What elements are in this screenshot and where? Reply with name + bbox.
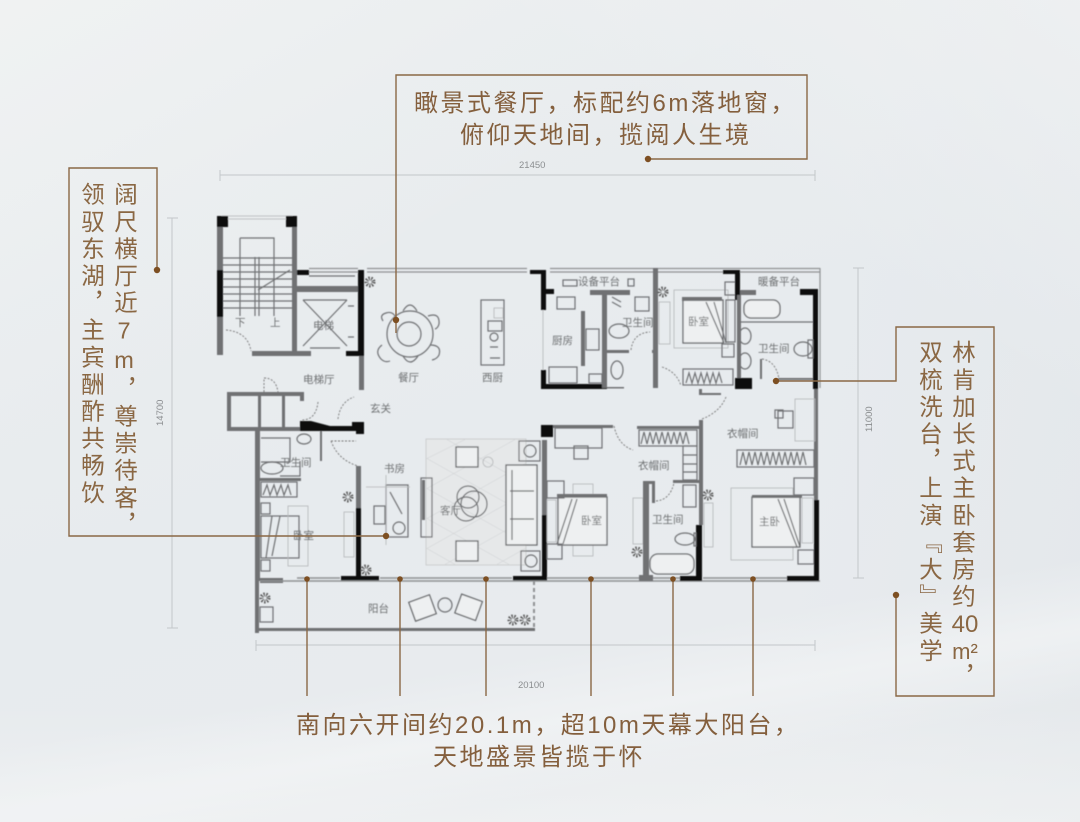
west bedroom: 卧室 (293, 529, 314, 542)
balcony: 阳台 (368, 602, 389, 615)
western kitchen (481, 300, 504, 384)
master bath (723, 270, 818, 389)
dimension: 20100: 20100 (518, 680, 544, 691)
kitchen (530, 270, 634, 389)
elevator: 电梯 (313, 319, 334, 332)
south-centre closet and bath: 卫生间 (652, 513, 684, 526)
living room: 客厅 (440, 504, 461, 517)
elevator hall and entry: 玄关 (370, 402, 391, 415)
western kitchen: 西厨 (482, 372, 503, 384)
callout: dining room view (393, 75, 807, 333)
kitchen: 设备平台 (578, 275, 620, 288)
callout text (414, 90, 797, 149)
living room (421, 439, 540, 571)
north-centre bath: 卫生间 (622, 316, 654, 329)
master bedroom (704, 478, 819, 581)
north bedroom: 卧室 (688, 315, 709, 328)
callout vertical text: ， (949, 664, 975, 691)
dimension lines (155, 160, 875, 691)
callout: south frontage (296, 576, 800, 771)
master walk-in closet (699, 389, 818, 525)
stairwell: 上 (270, 317, 280, 329)
balcony (255, 581, 535, 633)
study and west bath walls (255, 431, 379, 583)
callout vertical text: 阔尺横厅近7m，尊崇待客， (111, 182, 138, 539)
callout vertical text (916, 340, 978, 691)
callout vertical text: 40 (952, 611, 978, 638)
study (362, 278, 410, 574)
kitchen: 厨房 (552, 334, 573, 347)
callout vertical text: 林肯加长式主卧套房约 (949, 340, 976, 611)
stairwell (217, 216, 311, 356)
south-centre closet and bath (637, 426, 702, 581)
stair label: 下 (235, 317, 246, 329)
callout vertical text: 双梳洗台，上演『大』美学 (916, 340, 943, 665)
callout text: 瞰景式餐厅，标配约6m落地窗， (414, 90, 797, 117)
dimension: 11000: 11000 (864, 406, 875, 432)
elevator hall and entry: 电梯厅 (303, 373, 334, 386)
master bath: 卫生间 (758, 342, 790, 355)
elevator hall and entry (227, 373, 391, 434)
dimension: 14700: 14700 (155, 400, 166, 426)
callout vertical text: m² (952, 639, 978, 664)
north-centre bath (607, 268, 666, 388)
floor plan (217, 216, 820, 633)
south walls (260, 425, 820, 581)
dining room: 餐厅 (398, 371, 419, 384)
south-centre closet and bath: 衣帽间 (638, 459, 670, 472)
master bedroom: 主卧 (759, 515, 780, 528)
study: 书房 (384, 462, 405, 475)
south-centre bedroom (547, 425, 643, 559)
dimension: 21450: 21450 (519, 160, 545, 171)
north window (309, 268, 820, 388)
study and west bath walls: 卫生间 (280, 456, 312, 469)
callout vertical text (78, 182, 138, 539)
dining room (378, 305, 440, 384)
master walk-in closet: 衣帽间 (727, 427, 758, 440)
west bedroom (261, 503, 354, 571)
callout text: 南向六开间约20.1m，超10m天幕大阳台， (296, 712, 800, 739)
callout text: 天地盛景皆揽于怀 (433, 744, 645, 771)
south-centre bedroom: 卧室 (581, 514, 602, 527)
master bath: 暖备平台 (758, 275, 800, 288)
callout: living room width (69, 168, 389, 539)
callout: master suite (773, 327, 994, 696)
north bedroom (659, 282, 737, 419)
callout vertical text: 领驭东湖，主宾酬酢共畅饮 (78, 182, 105, 507)
elevator (292, 270, 364, 390)
callout text: 俯仰天地间，揽阅人生境 (460, 122, 752, 149)
callout text (296, 712, 800, 771)
